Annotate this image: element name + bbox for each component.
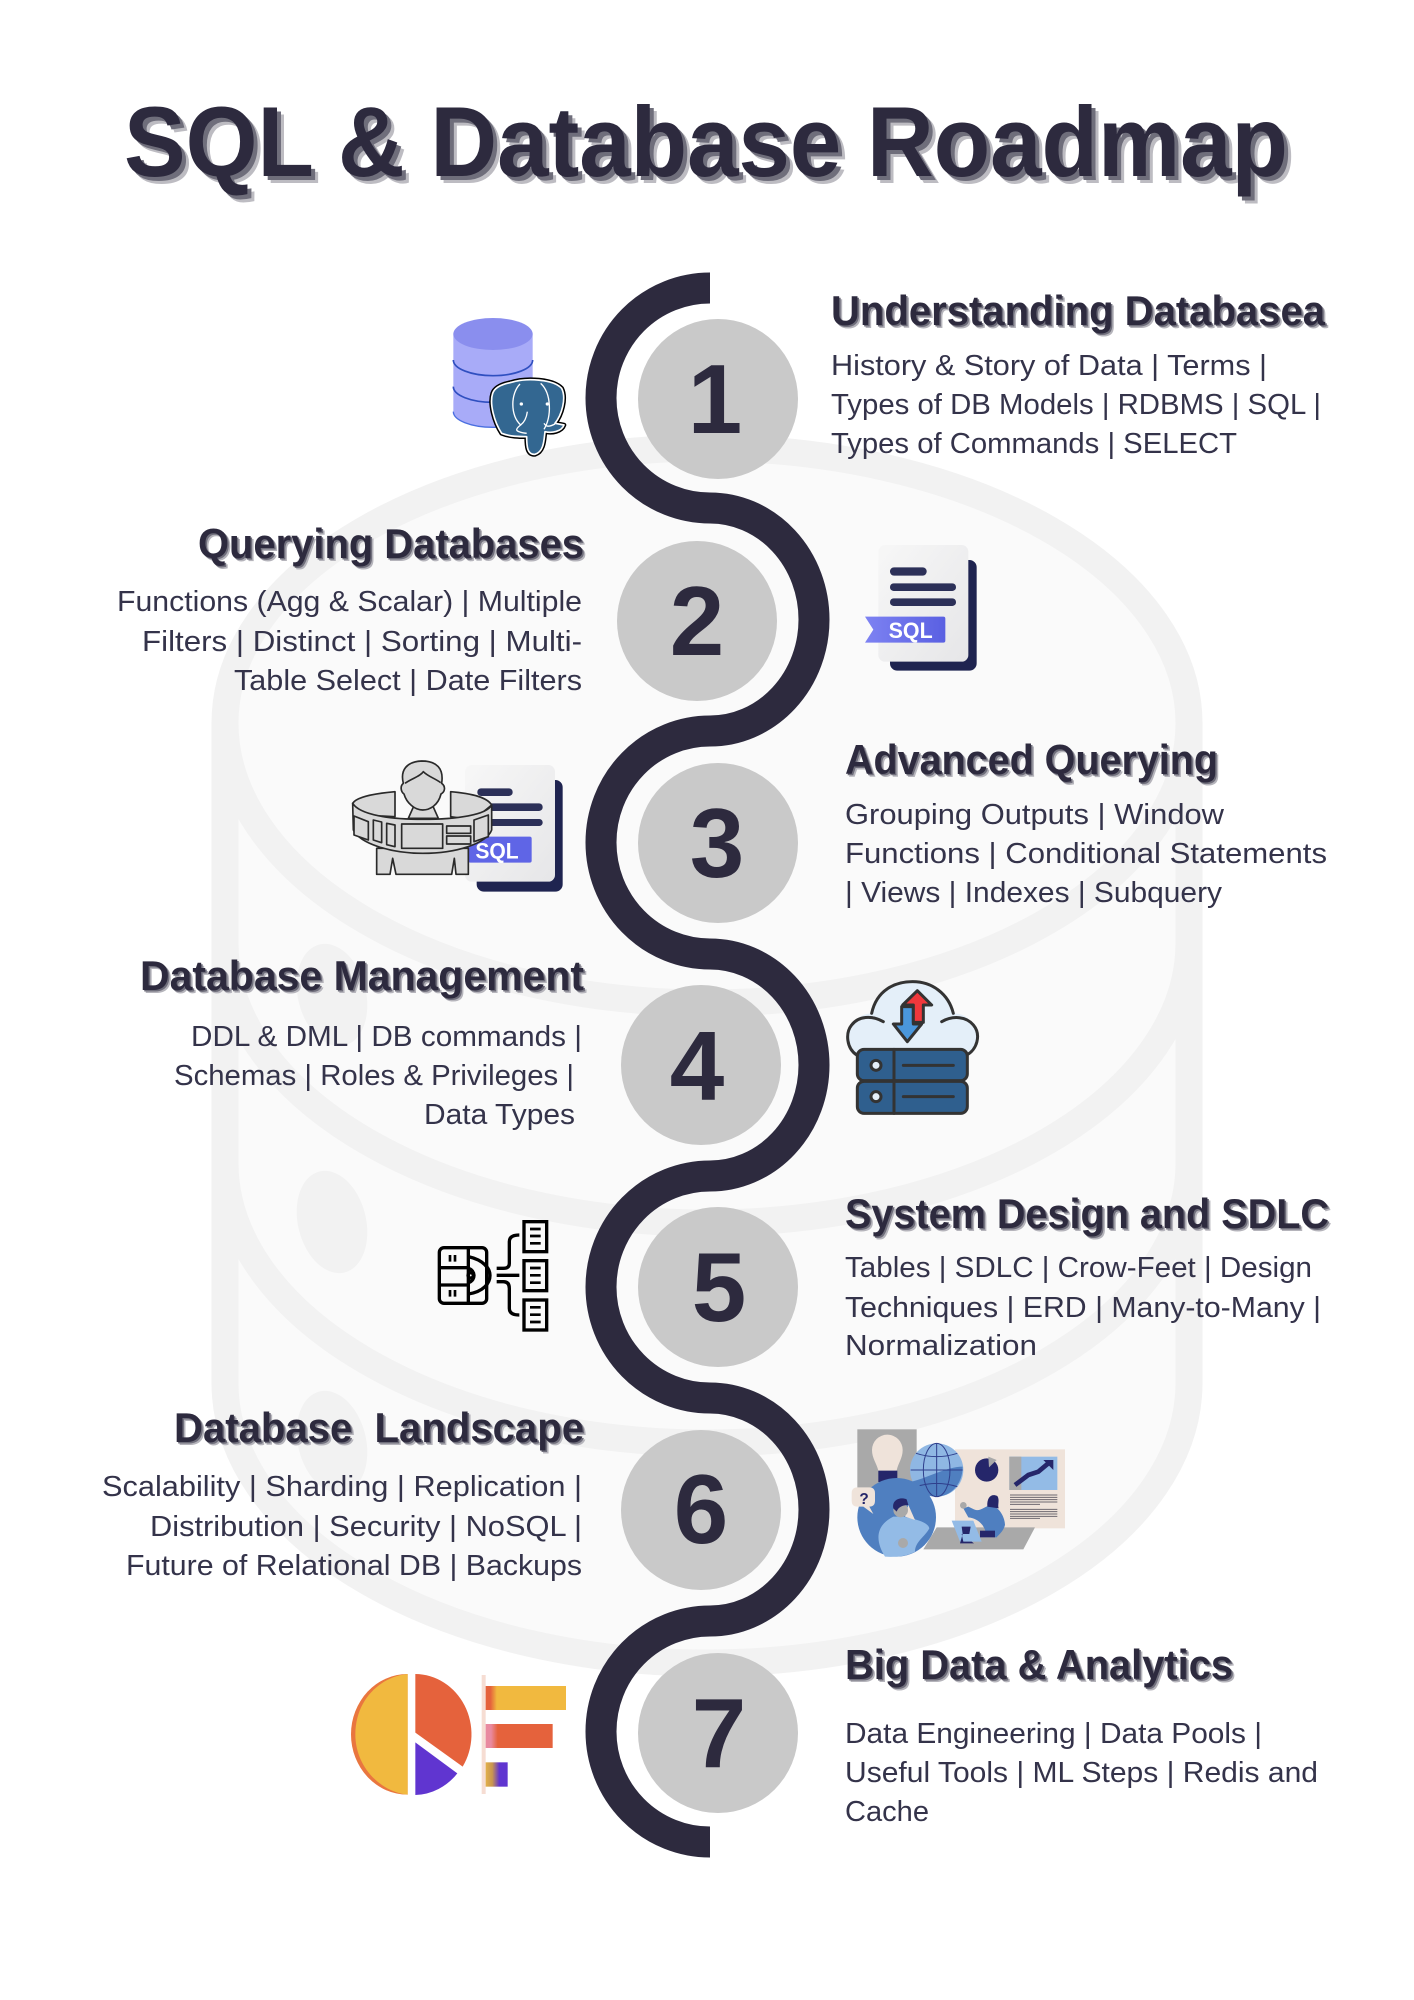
icon: pie chart and bars — [351, 1674, 566, 1795]
panel: step 7 text: Big Data & Analytics — [845, 1641, 1233, 1688]
panel: step 3 text: Grouping Outputs | Window — [845, 799, 1225, 831]
panel: step 7 text: Data Engineering | Data Pools | — [845, 1718, 1262, 1750]
step 1 marker: 1 — [688, 344, 742, 454]
step 3 marker — [638, 763, 798, 923]
panel: step 6 text: Database Landscape — [174, 1404, 584, 1451]
panel: step 3 text: Functions | Conditional Statements — [845, 838, 1327, 870]
title: SQL & Database Roadmap — [124, 86, 1288, 197]
panel: step 1 text: Types of Commands | SELECT — [831, 428, 1237, 460]
panel: step 2 text: Filters | Distinct | Sorting | Multi- — [142, 626, 582, 658]
step 4 marker — [621, 985, 781, 1145]
step 6 marker: 6 — [674, 1454, 728, 1564]
panel: step 5 text: Normalization — [845, 1330, 1037, 1362]
step 3 marker: 3 — [690, 788, 744, 898]
serpentine roadmap path — [601, 288, 814, 1842]
icon: SQL document: SQL — [889, 618, 933, 643]
step 5 marker — [638, 1207, 798, 1367]
panel: step 1 text: Understanding Databasea — [831, 287, 1326, 334]
panel: step 3 text: | Views | Indexes | Subquery — [845, 877, 1223, 909]
icon: people analysing data illustration: ? — [859, 1491, 869, 1508]
panel: step 7 text — [845, 1641, 1318, 1828]
panel: step 1 text — [831, 287, 1326, 460]
step 1 marker — [638, 319, 798, 479]
panel: step 6 text — [102, 1404, 584, 1582]
step 7 marker — [638, 1653, 798, 1813]
icon: SQL document — [865, 545, 977, 671]
panel: step 1 text: History & Story of Data | Terms | — [831, 350, 1267, 382]
icon: people analysing data illustration — [852, 1429, 1065, 1557]
panel: step 5 text: Tables | SDLC | Crow-Feet | Design — [845, 1252, 1312, 1284]
step 7 marker: 7 — [692, 1678, 746, 1788]
panel: step 5 text: System Design and SDLC — [845, 1190, 1329, 1237]
panel: step 6 text: Scalability | Sharding | Replication | — [102, 1471, 582, 1503]
panel: step 4 text — [140, 952, 584, 1131]
panel: step 2 text: Functions (Agg & Scalar) | Multiple — [117, 586, 582, 618]
icon: database with postgres elephant — [453, 318, 564, 454]
step 2 marker: 2 — [670, 566, 724, 676]
step 2 marker — [617, 541, 777, 701]
panel: step 2 text — [117, 520, 584, 697]
background: database cylinder watermark — [225, 448, 1189, 1663]
panel: step 3 text — [845, 736, 1327, 909]
panel: step 4 text: Data Types — [424, 1099, 575, 1131]
panel: step 1 text: Types of DB Models | RDBMS | SQL | — [831, 389, 1321, 421]
step 6 marker — [621, 1430, 781, 1590]
panel: step 6 text: Future of Relational DB | Backups — [126, 1550, 582, 1582]
panel: step 7 text: Cache — [845, 1796, 929, 1828]
panel: step 2 text: Querying Databases — [198, 520, 584, 567]
icon: cloud server — [848, 982, 978, 1113]
icon: person with holographic screens and SQL document: SQL — [475, 838, 519, 863]
panel: step 5 text — [845, 1190, 1329, 1362]
step 5 marker: 5 — [692, 1232, 746, 1342]
panel: step 4 text: DDL & DML | DB commands | — [191, 1021, 582, 1053]
step 4 marker: 4 — [670, 1011, 724, 1121]
panel: step 3 text: Advanced Querying — [845, 736, 1218, 783]
panel: step 4 text: Schemas | Roles & Privileges | — [174, 1060, 574, 1092]
panel: step 5 text: Techniques | ERD | Many-to-Many | — [845, 1292, 1321, 1324]
icon: person with holographic screens and SQL document — [353, 761, 563, 892]
panel: step 2 text: Table Select | Date Filters — [234, 665, 582, 697]
icon: server with document tree — [439, 1222, 547, 1330]
panel: step 4 text: Database Management — [140, 952, 584, 999]
panel: step 7 text: Useful Tools | ML Steps | Redis and — [845, 1757, 1318, 1789]
panel: step 6 text: Distribution | Security | NoSQL | — [150, 1511, 582, 1543]
